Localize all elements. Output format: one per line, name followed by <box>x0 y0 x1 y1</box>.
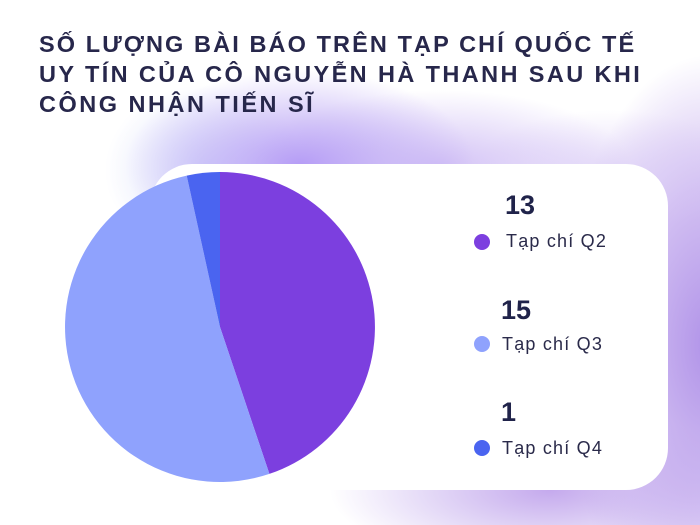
legend: Q4 <box>474 397 603 458</box>
dot Q4 <box>474 440 490 456</box>
slice: Q2 13 <box>220 172 375 474</box>
slice: Q4 1 <box>187 172 220 327</box>
label Q4: Tạp chí Q4 <box>502 438 603 458</box>
title: CÔNG NHẬN TIẾN SĨ <box>39 91 315 117</box>
value 15: 15 <box>501 295 531 325</box>
panel: white card <box>150 164 668 490</box>
slice: Q3 15 <box>65 176 269 482</box>
pie chart <box>65 172 375 482</box>
value 1: 1 <box>501 397 516 427</box>
dot Q2 <box>474 234 490 250</box>
title: SỐ LƯỢNG BÀI BÁO TRÊN TẠP CHÍ QUỐC TẾ <box>39 31 636 57</box>
label Q2: Tạp chí Q2 <box>506 231 607 251</box>
legend: Q3 <box>474 295 603 354</box>
value 13: 13 <box>505 190 535 220</box>
title: UY TÍN CỦA CÔ NGUYỄN HÀ THANH SAU KHI <box>39 61 642 87</box>
legend: Q2 <box>474 190 607 251</box>
title <box>39 31 642 117</box>
label Q3: Tạp chí Q3 <box>502 334 603 354</box>
dot Q3 <box>474 336 490 352</box>
